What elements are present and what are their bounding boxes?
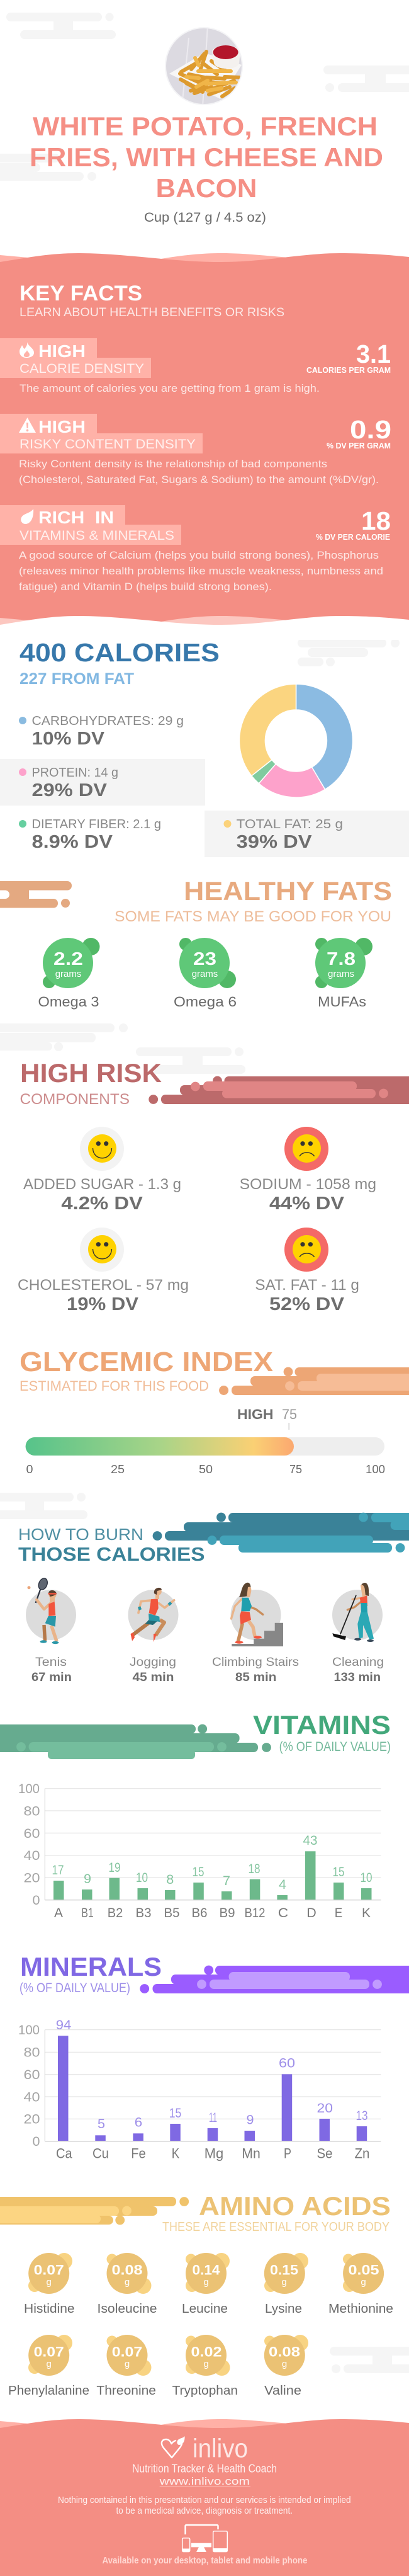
bar chart: vitamins: 10 bbox=[360, 1871, 373, 1885]
amino: methionine: Methionine bbox=[328, 2302, 393, 2316]
stat: mufas: 7.8 bbox=[327, 949, 356, 969]
fact: rich in vitamins and minerals: (releaves minor health problems like muscle weakness, numbness and bbox=[19, 566, 383, 577]
amino: methionine: 0.05 bbox=[349, 2262, 379, 2278]
fact: rich in vitamins and minerals: % DV PER CALORIE bbox=[316, 532, 390, 542]
heading: high risk: HIGH RISK bbox=[20, 1058, 162, 1088]
heading: minerals: MINERALS bbox=[20, 1952, 162, 1981]
gauge scale: 100 bbox=[366, 1463, 385, 1476]
bar chart: minerals: 5 bbox=[98, 2117, 105, 2131]
gauge bar bbox=[26, 1437, 384, 1456]
panel: footer bbox=[0, 2419, 409, 2576]
fact: rich in vitamins and minerals: RICH IN bbox=[38, 508, 114, 527]
bar chart: minerals: 40 bbox=[24, 2090, 40, 2105]
bar chart: minerals: Zn bbox=[355, 2146, 370, 2162]
amino: threonine: Threonine bbox=[96, 2384, 156, 2398]
heading: key facts: KEY FACTS bbox=[20, 282, 142, 305]
panel: minerals bbox=[18, 1952, 409, 2162]
fact: rich in vitamins and minerals: VITAMINS & MINERALS bbox=[20, 528, 174, 543]
legend: dietary fiber: 8.9% DV bbox=[31, 832, 113, 852]
bar chart: vitamins: 18 bbox=[248, 1862, 261, 1876]
risk: sodium bbox=[240, 1127, 376, 1214]
gauge scale bbox=[26, 1463, 385, 1476]
subheading: SOME FATS MAY BE GOOD FOR YOU bbox=[115, 908, 391, 925]
amino: phenylalanine: g bbox=[47, 2359, 52, 2369]
amino: leucine bbox=[182, 2253, 230, 2316]
fact: calorie density: CALORIES PER GRAM bbox=[306, 365, 391, 375]
donut chart: macronutrients bbox=[239, 684, 353, 797]
bar chart: vitamins: 40 bbox=[24, 1849, 40, 1863]
tagline: Nutrition Tracker & Health Coach bbox=[132, 2463, 277, 2475]
bar chart: vitamins: 80 bbox=[24, 1804, 40, 1819]
risk: cholesterol: 19% DV bbox=[67, 1294, 139, 1314]
bar chart: vitamins: 4 bbox=[279, 1878, 286, 1892]
bar chart: minerals: Mn bbox=[242, 2146, 261, 2162]
value: high 75: HIGH bbox=[237, 1406, 273, 1422]
panel: how to burn those calories bbox=[18, 1513, 409, 1684]
logo: wordmark: inlivo bbox=[193, 2434, 248, 2463]
fact: risky content density: RISKY CONTENT DENSITY bbox=[20, 437, 196, 452]
fact: risky content density: 0.9 bbox=[350, 415, 391, 444]
heading: how to burn: HOW TO BURN bbox=[18, 1525, 143, 1544]
panel: amino acids bbox=[0, 2191, 393, 2398]
stat: omega 3: grams bbox=[55, 969, 81, 979]
subheading: percent of daily value: (% OF DAILY VALUE) bbox=[279, 1740, 391, 1754]
amino: valine bbox=[264, 2335, 308, 2398]
fact: calorie density bbox=[0, 338, 391, 394]
title: BACON bbox=[156, 173, 257, 203]
logo: inlivo heart bbox=[162, 2436, 185, 2458]
bar chart: vitamins: 0 bbox=[33, 1893, 40, 1908]
legend: carbohydrates bbox=[19, 714, 184, 749]
bar chart: minerals: K bbox=[172, 2146, 180, 2162]
title: FRIES, WITH CHEESE AND bbox=[30, 142, 383, 172]
bar chart: vitamins bbox=[18, 1782, 381, 1920]
stat: omega 3: Omega 3 bbox=[38, 994, 99, 1010]
risk: saturated fat: 52% DV bbox=[269, 1294, 345, 1314]
heading: those calories: THOSE CALORIES bbox=[18, 1543, 205, 1565]
bar chart: vitamins: 15 bbox=[193, 1865, 204, 1879]
amino: isoleucine: Isoleucine bbox=[97, 2302, 157, 2316]
icon: flame bbox=[20, 342, 34, 358]
amino: leucine: Leucine bbox=[182, 2302, 228, 2316]
bar chart: vitamins: 15 bbox=[332, 1865, 345, 1879]
heading: 400 calories: 400 CALORIES bbox=[20, 638, 220, 667]
activity: cleaning bbox=[332, 1583, 383, 1642]
availability note: Available on your desktop, tablet and mobile phone bbox=[102, 2555, 307, 2566]
heading: amino acids: AMINO ACIDS bbox=[199, 2191, 391, 2221]
bar chart: vitamins: B12 bbox=[244, 1906, 266, 1920]
panel: glycemic index bbox=[20, 1347, 409, 1476]
amino: valine: Valine bbox=[264, 2384, 301, 2398]
stat: mufas: MUFAs bbox=[318, 994, 366, 1010]
legend: total fat: TOTAL FAT: 25 g bbox=[237, 818, 343, 831]
activity labels: Jogging bbox=[130, 1656, 176, 1669]
legend: total fat: 39% DV bbox=[237, 832, 312, 852]
bar chart: vitamins: 9 bbox=[84, 1872, 91, 1886]
activity labels: 45 min bbox=[132, 1671, 174, 1684]
bar chart: minerals: 20 bbox=[24, 2112, 40, 2126]
amino: valine: g bbox=[282, 2359, 287, 2369]
serving size: Cup (127 g / 4.5 oz) bbox=[144, 210, 266, 225]
gauge scale: 50 bbox=[199, 1463, 213, 1476]
value: high 75: 75 bbox=[282, 1406, 297, 1422]
risk: saturated fat: SAT. FAT - 11 g bbox=[255, 1277, 359, 1294]
risk: sodium: SODIUM - 1058 mg bbox=[240, 1176, 376, 1193]
title: WHITE POTATO, FRENCH bbox=[33, 111, 378, 141]
gauge scale: 25 bbox=[111, 1463, 125, 1476]
amino: tryptophan: g bbox=[203, 2359, 209, 2369]
bar chart: vitamins: 8 bbox=[166, 1872, 174, 1887]
amino: leucine: g bbox=[203, 2277, 209, 2288]
fact: calorie density: HIGH bbox=[38, 341, 86, 361]
amino: phenylalanine: 0.07 bbox=[34, 2344, 64, 2360]
bar chart: minerals: 11 bbox=[209, 2111, 217, 2125]
panel: calories bbox=[0, 638, 409, 857]
bar chart: minerals: Mg bbox=[204, 2146, 223, 2162]
bar chart: vitamins: 19 bbox=[108, 1861, 121, 1875]
amino: lysine: 0.15 bbox=[270, 2262, 298, 2278]
fact: risky content density: Risky Content density is the relationship of bad components bbox=[19, 459, 327, 470]
bar chart: minerals: 100 bbox=[18, 2023, 40, 2037]
amino: lysine: g bbox=[281, 2277, 287, 2288]
bar chart: vitamins: 20 bbox=[24, 1871, 40, 1886]
bar chart: vitamins: B6 bbox=[191, 1906, 208, 1920]
activity: jogging bbox=[128, 1588, 179, 1642]
value: high 75 bbox=[237, 1406, 297, 1430]
bar chart: vitamins: A bbox=[54, 1906, 63, 1920]
amino: threonine: 0.07 bbox=[112, 2344, 142, 2360]
bar chart: vitamins: B9 bbox=[219, 1906, 235, 1920]
fact: rich in vitamins and minerals: fatigue) and Vitamin D (helps build strong bones). bbox=[19, 581, 272, 593]
disclaimer bbox=[58, 2495, 351, 2516]
activity: climbing stairs bbox=[230, 1583, 283, 1646]
bar chart: vitamins: 17 bbox=[52, 1863, 64, 1878]
bar chart: vitamins: B5 bbox=[164, 1906, 180, 1920]
subheading: percent of daily value: (% OF DAILY VALUE) bbox=[20, 1981, 130, 1995]
bar chart: vitamins: K bbox=[362, 1906, 371, 1920]
risk: added sugar: 4.2% DV bbox=[61, 1194, 143, 1214]
bar chart: minerals: Ca bbox=[56, 2146, 72, 2162]
fact: calorie density: The amount of calories you are getting from 1 gram is high. bbox=[20, 383, 320, 394]
amino: histidine bbox=[24, 2253, 75, 2316]
bar chart: vitamins: 7 bbox=[223, 1874, 230, 1888]
bar chart: minerals: 6 bbox=[135, 2116, 142, 2130]
amino: leucine: 0.14 bbox=[193, 2262, 220, 2278]
stat: omega 6: grams bbox=[192, 969, 218, 979]
legend: dietary fiber bbox=[19, 818, 161, 852]
bar chart: vitamins: B1 bbox=[81, 1906, 94, 1920]
activity labels: 133 min bbox=[334, 1671, 381, 1684]
risk: saturated fat bbox=[255, 1228, 359, 1314]
icon: leaf bbox=[21, 509, 33, 524]
amino: phenylalanine: Phenylalanine bbox=[8, 2384, 89, 2398]
stat: mufas bbox=[315, 938, 373, 1010]
subheading: components: COMPONENTS bbox=[20, 1091, 130, 1108]
bar chart: minerals: 80 bbox=[24, 2046, 40, 2060]
amino: valine: 0.08 bbox=[269, 2344, 300, 2360]
activity: tennis bbox=[26, 1577, 76, 1644]
subheading: LEARN ABOUT HEALTH BENEFITS OR RISKS bbox=[20, 305, 284, 319]
legend: carbohydrates: CARBOHYDRATES: 29 g bbox=[31, 714, 184, 728]
bar chart: vitamins: 100 bbox=[18, 1782, 40, 1796]
risk: added sugar bbox=[23, 1127, 181, 1214]
subheading: THESE ARE ESSENTIAL FOR YOUR BODY bbox=[162, 2220, 389, 2234]
bar chart: vitamins: D bbox=[306, 1906, 317, 1920]
panel: high risk components bbox=[18, 1058, 409, 1314]
amino: tryptophan: Tryptophan bbox=[172, 2384, 238, 2398]
amino: phenylalanine bbox=[8, 2335, 89, 2398]
bar chart: vitamins: C bbox=[278, 1906, 288, 1920]
amino: histidine: 0.07 bbox=[34, 2262, 64, 2278]
panel: key facts bbox=[0, 253, 409, 640]
icon: warning bbox=[19, 418, 36, 433]
stat: omega 3: 2.2 bbox=[53, 949, 83, 969]
bar chart: vitamins: B3 bbox=[136, 1906, 151, 1920]
legend: total fat bbox=[204, 811, 409, 857]
bar chart: minerals: 9 bbox=[247, 2113, 254, 2128]
website link: www.inlivo.com bbox=[159, 2475, 250, 2487]
amino: isoleucine: g bbox=[125, 2277, 130, 2288]
heading: glycemic index: GLYCEMIC INDEX bbox=[20, 1347, 273, 1377]
legend: dietary fiber: DIETARY FIBER: 2.1 g bbox=[31, 818, 161, 831]
bar chart: vitamins: B2 bbox=[108, 1906, 123, 1920]
bar chart: vitamins: 43 bbox=[303, 1833, 317, 1848]
fact: risky content density bbox=[0, 414, 391, 486]
bar chart: minerals: 0 bbox=[33, 2134, 40, 2149]
food photo: french fries with ketchup bbox=[164, 25, 245, 107]
disclaimer: Nothing contained in this presentation and our services is intended or implied bbox=[58, 2495, 351, 2505]
title bbox=[30, 111, 383, 203]
amino: isoleucine: 0.08 bbox=[112, 2262, 142, 2278]
stat: omega 6: Omega 6 bbox=[174, 994, 237, 1010]
panel: vitamins bbox=[0, 1710, 391, 1920]
fact: rich in vitamins and minerals bbox=[0, 505, 391, 593]
activity labels: Climbing Stairs bbox=[212, 1656, 299, 1669]
activity labels: 85 min bbox=[235, 1671, 276, 1684]
amino: threonine bbox=[96, 2335, 156, 2398]
bar chart: minerals: 60 bbox=[279, 2056, 295, 2071]
bar chart: minerals: Se bbox=[317, 2146, 332, 2162]
legend: protein: PROTEIN: 14 g bbox=[31, 766, 118, 780]
activity labels bbox=[31, 1656, 384, 1684]
fact: rich in vitamins and minerals: 18 bbox=[361, 506, 391, 535]
bar chart: minerals: 94 bbox=[56, 2018, 72, 2032]
activity labels: Cleaning bbox=[332, 1656, 384, 1669]
bar chart: vitamins: E bbox=[335, 1906, 342, 1920]
amino: lysine bbox=[264, 2253, 308, 2316]
bar chart: minerals: 15 bbox=[169, 2106, 181, 2121]
legend: carbohydrates: 10% DV bbox=[31, 729, 105, 749]
activity labels: Tenis bbox=[35, 1656, 67, 1669]
risk: added sugar: ADDED SUGAR - 1.3 g bbox=[23, 1176, 181, 1193]
amino: methionine: g bbox=[361, 2277, 366, 2288]
bar chart: vitamins: 10 bbox=[136, 1871, 148, 1885]
amino: histidine: Histidine bbox=[24, 2302, 75, 2316]
bar chart: minerals: 60 bbox=[24, 2068, 40, 2082]
stat: omega 3 bbox=[38, 938, 99, 1010]
bar chart: minerals bbox=[18, 2018, 381, 2162]
risk: cholesterol bbox=[18, 1228, 189, 1314]
bar chart: minerals: 13 bbox=[356, 2109, 367, 2123]
stat: omega 6 bbox=[174, 938, 237, 1010]
legend: protein: 29% DV bbox=[31, 780, 108, 801]
heading: vitamins: VITAMINS bbox=[253, 1710, 391, 1740]
bar chart: minerals: Fe bbox=[131, 2146, 146, 2162]
amino: isoleucine bbox=[97, 2253, 157, 2316]
stat: mufas: grams bbox=[328, 969, 354, 979]
icon: devices bbox=[182, 2525, 227, 2552]
heading: healthy fats: HEALTHY FATS bbox=[184, 876, 392, 906]
risk: cholesterol: CHOLESTEROL - 57 mg bbox=[18, 1277, 189, 1294]
fact: risky content density: % DV PER GRAM bbox=[327, 441, 391, 450]
subheading: ESTIMATED FOR THIS FOOD bbox=[20, 1378, 209, 1394]
gauge scale: 75 bbox=[289, 1463, 302, 1476]
fact: risky content density: HIGH bbox=[38, 417, 86, 436]
legend: protein bbox=[0, 759, 205, 806]
amino: tryptophan: 0.02 bbox=[191, 2344, 221, 2360]
risk: sodium: 44% DV bbox=[269, 1194, 345, 1214]
panel: healthy fats bbox=[0, 876, 392, 1010]
subheading: calories from fat: 227 FROM FAT bbox=[20, 670, 134, 688]
amino: histidine: g bbox=[47, 2277, 52, 2288]
fact: calorie density: 3.1 bbox=[356, 339, 391, 368]
fact: rich in vitamins and minerals: A good source of Calcium (helps you build strong bones), Phosphorus bbox=[19, 550, 379, 561]
fact: calorie density: CALORIE DENSITY bbox=[20, 362, 144, 376]
bar chart: vitamins: 60 bbox=[24, 1827, 40, 1841]
activity labels: 67 min bbox=[31, 1671, 72, 1684]
bar chart: minerals: Cu bbox=[92, 2146, 109, 2162]
bar chart: minerals: P bbox=[284, 2146, 291, 2162]
amino: tryptophan bbox=[172, 2335, 238, 2398]
fact: risky content density: (Cholesterol, Saturated Fat, Sugars & Sodium) to the amount (%DV/gr). bbox=[19, 474, 379, 486]
amino: threonine: g bbox=[125, 2359, 130, 2369]
stat: omega 6: 23 bbox=[193, 949, 216, 969]
amino: methionine bbox=[328, 2253, 393, 2316]
gauge scale: 0 bbox=[26, 1463, 33, 1476]
amino: lysine: Lysine bbox=[265, 2302, 302, 2316]
bar chart: minerals: 20 bbox=[317, 2101, 333, 2116]
disclaimer: to be a medical advice, diagnosis or treatment. bbox=[116, 2505, 293, 2516]
